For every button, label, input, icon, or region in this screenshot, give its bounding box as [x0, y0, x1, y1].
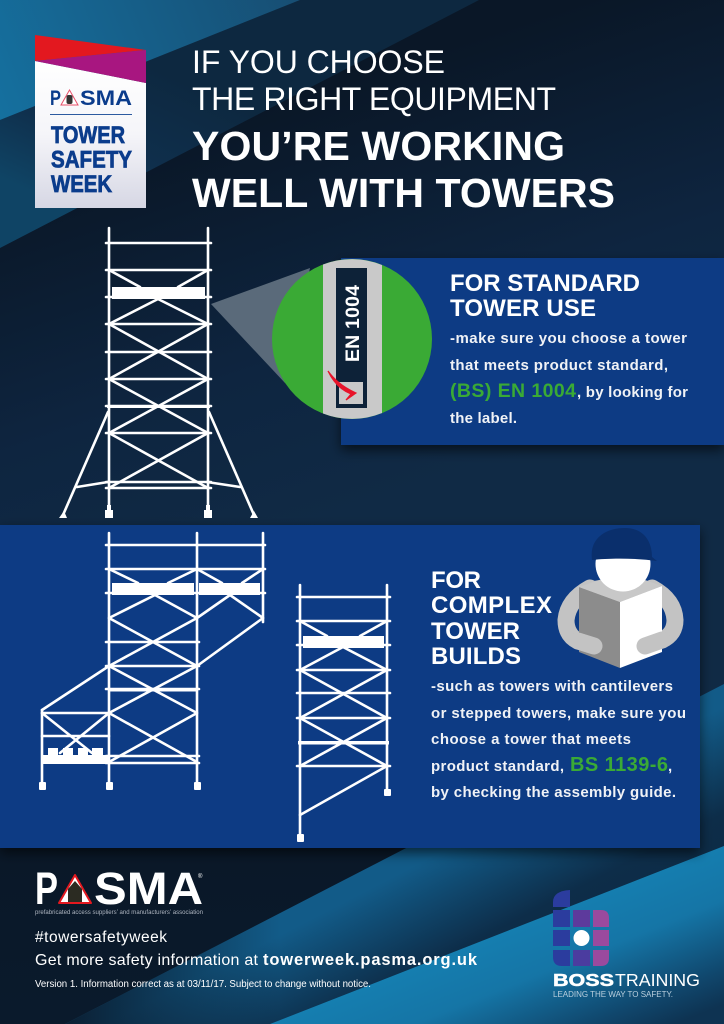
text: standard tower use: FOR STANDARD: [450, 270, 640, 297]
footer text: Get more safety information at: [35, 952, 259, 969]
text: standard tower use: , by looking for: [577, 384, 688, 401]
logo: Boss Training: LEADING THE WAY TO SAFETY.: [553, 990, 673, 999]
callout cone: [211, 268, 310, 383]
footer text: #towersafetyweek: [35, 929, 167, 946]
icon: person reading assembly guide: [566, 528, 675, 668]
logo: PASMA: ®: [198, 873, 203, 880]
illustration: standard tower: [59, 228, 258, 518]
text: complex tower builds: TOWER: [431, 618, 520, 645]
text: standard tower use: [450, 270, 688, 427]
text: complex tower builds: -such as towers with cantilevers: [431, 678, 673, 695]
logo: PASMA: [35, 863, 203, 916]
logo: Tower Safety Week badge: P: [50, 87, 61, 110]
title: THE RIGHT EQUIPMENT: [192, 81, 556, 117]
text: complex tower builds: BS 1139-6: [570, 754, 668, 776]
text: complex tower builds: BUILDS: [431, 643, 521, 670]
logo: Tower Safety Week badge: TOWER: [51, 122, 125, 149]
text: standard tower use: TOWER USE: [450, 295, 596, 322]
text: complex tower builds: [431, 567, 686, 801]
title: WELL WITH TOWERS: [192, 170, 615, 216]
logo: Tower Safety Week badge: SAFETY: [51, 146, 132, 174]
text: complex tower builds: ,: [668, 758, 672, 775]
logo: PASMA: P: [35, 863, 58, 914]
callout: EN 1004 label magnified: EN 1004: [342, 285, 364, 362]
text: standard tower use: (BS) EN 1004: [450, 380, 576, 402]
logo: Boss Training: [553, 890, 700, 999]
text: complex tower builds: product standard,: [431, 758, 564, 775]
text: standard tower use: that meets product standard,: [450, 357, 668, 374]
logo: PASMA: SMA: [94, 863, 203, 914]
illustration: tower on slope: [297, 585, 391, 842]
logo: Tower Safety Week badge: [35, 35, 146, 208]
panel: complex tower builds: [0, 525, 700, 848]
text: complex tower builds: FOR: [431, 567, 481, 594]
footer text: Version 1. Information correct as at 03/11/17. Subject to change without notice.: [35, 979, 371, 990]
callout: EN 1004 label magnified: [272, 259, 432, 419]
text: complex tower builds: by checking the assembly guide.: [431, 784, 676, 801]
footer text: towerweek.pasma.org.uk: [263, 951, 478, 969]
title: [192, 44, 615, 216]
logo: PASMA: prefabricated access suppliers’ and manufacturers’ association: [35, 910, 203, 916]
text: complex tower builds: COMPLEX: [431, 592, 552, 619]
text: standard tower use: the label.: [450, 410, 517, 427]
title: IF YOU CHOOSE: [192, 44, 445, 80]
illustration: stepped tower with cantilever: [39, 533, 265, 790]
logo: Boss Training: BOSS: [553, 970, 614, 990]
logo: Tower Safety Week badge: SMA: [80, 87, 132, 110]
footer text: [35, 929, 478, 990]
title: YOU’RE WORKING: [192, 123, 565, 169]
panel: standard tower use: [341, 258, 724, 445]
text: complex tower builds: choose a tower that meets: [431, 731, 631, 748]
logo: Tower Safety Week badge: WEEK: [51, 171, 112, 198]
text: standard tower use: -make sure you choose a tower: [450, 330, 687, 347]
logo: Boss Training: TRAINING: [615, 970, 700, 990]
text: complex tower builds: or stepped towers, make sure you: [431, 705, 686, 722]
